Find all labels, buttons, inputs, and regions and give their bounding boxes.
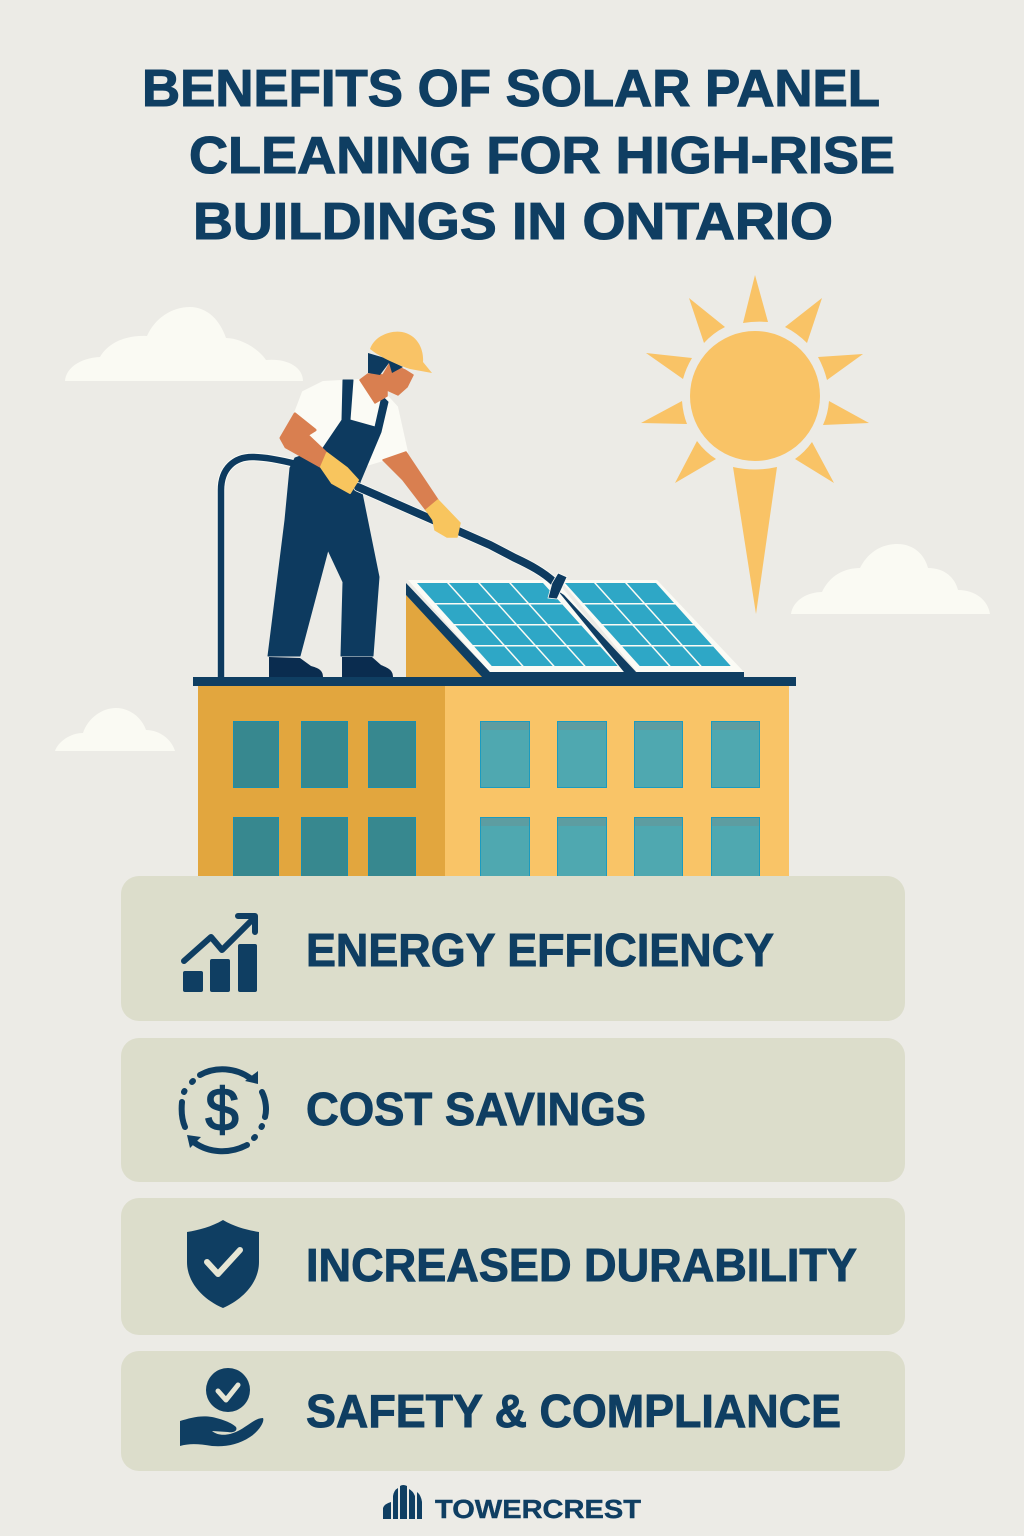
panel: increased durability (121, 1198, 905, 1335)
left arm (281, 414, 326, 466)
solar panels (406, 580, 744, 677)
label: COST SAVINGS (306, 1083, 646, 1135)
label: SAFETY & COMPLIANCE (306, 1385, 841, 1437)
icon: growth chart (183, 916, 257, 992)
hard hat (370, 332, 432, 373)
right glove (426, 500, 460, 537)
title (142, 60, 895, 251)
icon: hand holding check (180, 1368, 263, 1446)
icon: dollar cycle: $ (205, 1076, 239, 1143)
title: BUILDINGS IN ONTARIO (193, 193, 833, 251)
panel: energy efficiency (121, 876, 905, 1021)
icon: shield with check (187, 1220, 259, 1308)
boots (269, 657, 393, 677)
building (198, 686, 789, 876)
overalls (268, 380, 388, 656)
cloud: lower left (55, 708, 175, 751)
shirt (295, 380, 407, 470)
label: INCREASED DURABILITY (306, 1239, 857, 1291)
label: ENERGY EFFICIENCY (306, 924, 774, 976)
pole nozzle (548, 573, 567, 599)
cleaning pole (358, 487, 554, 582)
panel: safety and compliance (121, 1351, 905, 1471)
icon: tower bars (383, 1485, 422, 1519)
logo: towercrest (383, 1485, 641, 1524)
head and neck (360, 363, 413, 403)
logo: towercrest: TOWERCREST (435, 1494, 641, 1524)
cloud: right (791, 544, 990, 614)
title: BENEFITS OF SOLAR PANEL (142, 60, 880, 118)
windows: shaded wing (234, 722, 416, 876)
windows: sunlit wing (480, 722, 760, 876)
hose (221, 457, 296, 677)
panel: cost savings (121, 1038, 905, 1182)
roof ledge (193, 677, 796, 686)
sun (641, 275, 869, 614)
right arm (383, 452, 438, 510)
cloud: upper left (65, 307, 303, 381)
hair (368, 353, 403, 375)
icon: dollar cycle (182, 1069, 266, 1151)
left glove (321, 453, 358, 493)
title: CLEANING FOR HIGH-RISE (189, 127, 895, 185)
worker cleaning panels (221, 332, 567, 677)
